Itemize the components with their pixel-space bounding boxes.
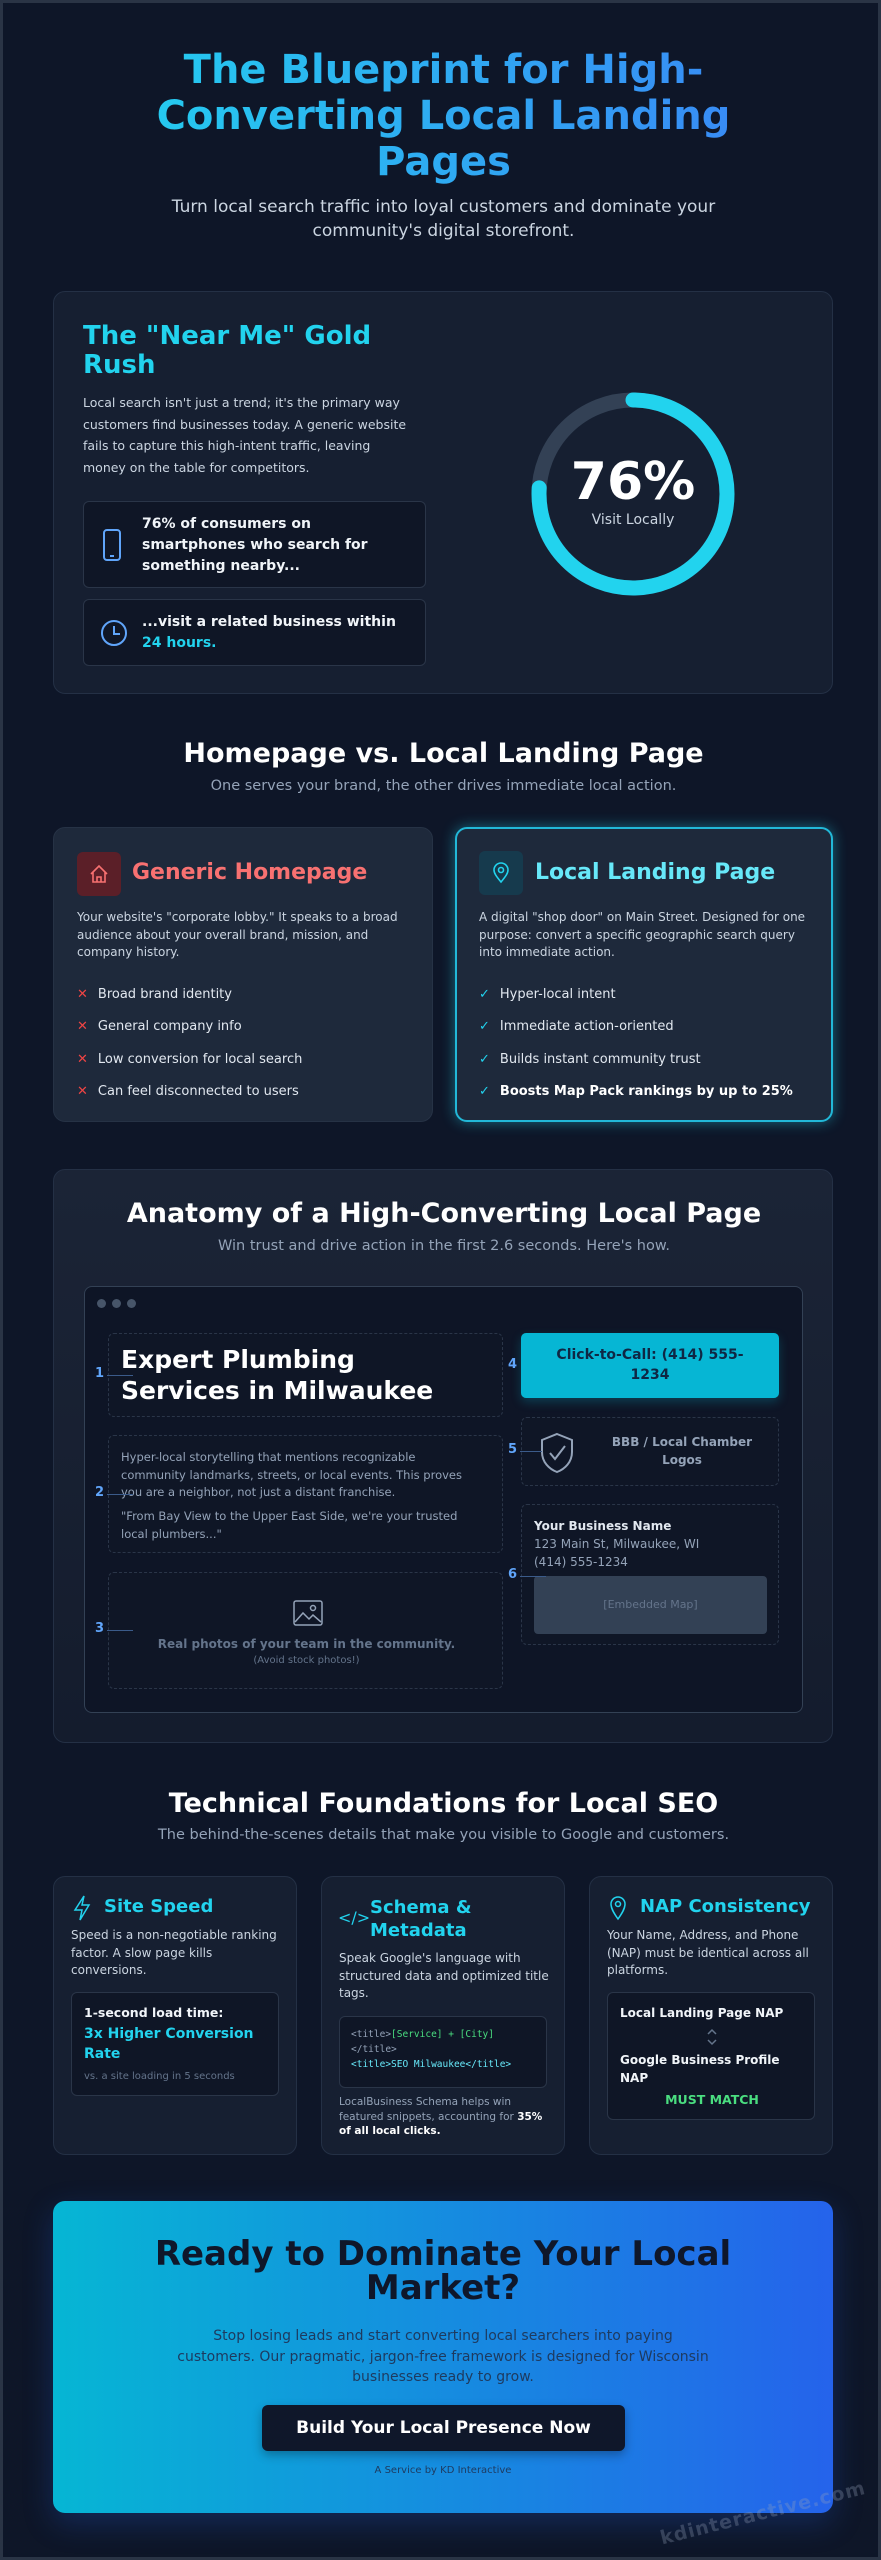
panel: generic homepage [53, 827, 433, 1122]
list: cons: ✕ General company info [77, 1019, 242, 1034]
title: The Blueprint for High- [184, 47, 703, 93]
CTA text: customers. Our pragmatic, jargon-free framework is designed for Wisconsin [177, 2348, 709, 2364]
card: site speed: Speed is a non-negotiable ranking factor. A slow page kills conversions. [71, 1928, 277, 1977]
list: pros: ✓ Immediate action-oriented [479, 1019, 674, 1034]
list: cons [77, 987, 302, 1099]
block 4: click to call: 1234 [631, 1367, 669, 1383]
icon: image [293, 1600, 323, 1626]
list: pros [479, 987, 793, 1099]
list: pros: ✓ Boosts Map Pack rankings by up to 25% [479, 1084, 793, 1099]
marker 1: 1 [95, 1366, 104, 1381]
donut label: Visit Locally [592, 512, 674, 528]
list: pros: ✓ Hyper-local intent [479, 987, 616, 1002]
CTA text: businesses ready to grow. [352, 2369, 534, 2385]
block 2: storytelling: "From Bay View to the Upper East Side, we're your trusted local plumbers..." [121, 1509, 457, 1540]
icon: clock [101, 620, 127, 646]
block 3: photos: (Avoid stock photos!) [253, 1655, 360, 1666]
subheading: Win trust and drive action in the first 2.6 seconds. Here's how. [218, 1238, 670, 1254]
CTA panel [53, 2201, 833, 2513]
embedded map: [Embedded Map] [603, 1598, 698, 1611]
card: schema: LocalBusiness Schema helps win featured snippets, accounting for 35% of all local clicks. [339, 2096, 542, 2137]
card: NAP [589, 1876, 833, 2155]
icon: map pin [479, 851, 523, 895]
block 3: photos [108, 1572, 503, 1689]
CTA button: Build Your Local Presence Now [296, 2418, 591, 2438]
marker 3: 3 [95, 1621, 104, 1636]
block 3: photos: Real photos of your team in the community. [158, 1637, 455, 1651]
heading: The "Near Me" Gold Rush [83, 321, 371, 380]
title [63, 47, 824, 185]
block 2: storytelling: Hyper-local storytelling that mentions recognizable community landmarks, streets, or local events. This proves you are a neighbor, not just a distant franchise. [121, 1450, 462, 1499]
body text: fails to capture this high-intent traffic, leaving [83, 438, 370, 453]
browser mockup [84, 1286, 803, 1713]
block 6: NAP + map [521, 1504, 779, 1645]
card: NAP: Your Name, Address, and Phone (NAP) must be identical across all platforms. [607, 1928, 809, 1977]
icon: house [77, 852, 121, 896]
embedded map [534, 1576, 767, 1634]
block 5: trust logos [521, 1417, 779, 1486]
match box [607, 1992, 815, 2120]
subheading: One serves your brand, the other drives immediate local action. [211, 778, 676, 794]
panel: near me gold rush [53, 291, 833, 694]
body text [83, 395, 406, 474]
body text: customers find businesses today. A generic website [83, 416, 406, 432]
code box: </title> [351, 2044, 397, 2055]
CTA button [262, 2405, 625, 2451]
heading: Anatomy of a High-Converting Local Page [127, 1198, 761, 1229]
list: cons: ✕ Low conversion for local search [77, 1052, 302, 1067]
title: Generic Homepage [132, 860, 367, 885]
body text: Local search isn't just a trend; it's the primary way [83, 395, 400, 410]
body text: money on the table for competitors. [83, 460, 310, 474]
stat box: smartphones [83, 501, 426, 588]
stat box: 1-second load time: [84, 2005, 223, 2020]
block 1: headline: Services in Milwaukee [121, 1376, 433, 1405]
donut value: 76% [571, 452, 695, 512]
heading: homepage vs local: Homepage vs. Local Landing Page [183, 738, 704, 769]
card: site speed [53, 1876, 297, 2155]
card: schema [321, 1876, 565, 2155]
stat box [71, 1992, 279, 2096]
stat box: 24 hours [83, 599, 426, 666]
title: Pages [376, 139, 511, 185]
footer credit: A Service by KD Interactive [375, 2465, 511, 2476]
title: Converting Local Landing [157, 93, 730, 139]
block 1: headline [108, 1333, 503, 1417]
match box: Local Landing Page NAP [620, 2006, 783, 2020]
panel: local landing page [455, 827, 833, 1122]
CTA heading: Ready to Dominate Your Local Market? [155, 2234, 731, 2308]
stat text: 24 hours. [142, 635, 216, 651]
icon: code: </> [338, 1908, 370, 1927]
card: schema: Schema & [370, 1897, 472, 1918]
icon: phone [103, 529, 121, 561]
list: pros: ✓ Builds instant community trust [479, 1052, 701, 1067]
stat text: ...visit a related business within [142, 614, 396, 630]
block 5: trust logos: BBB / Local Chamber [612, 1435, 752, 1449]
subheading: The behind-the-scenes details that make you visible to Google and customers. [158, 1827, 729, 1843]
icon: bolt [74, 1896, 90, 1920]
donut chart 76% [532, 392, 734, 596]
block 4: click to call: Click-to-Call: (414) 555- [556, 1347, 744, 1363]
stat box: vs. a site loading in 5 seconds [84, 2071, 235, 2082]
block 6: NAP + map: Your Business Name [534, 1519, 671, 1533]
card: schema: Speak Google's language with structured data and optimized title tags. [339, 1951, 549, 2000]
code box [339, 2016, 547, 2088]
stat text: 76% of consumers on smartphones who search for something nearby... [142, 516, 368, 574]
list: cons: ✕ Broad brand identity [77, 987, 232, 1002]
icon: shield [541, 1432, 573, 1473]
watermark: kdinteractive.com [658, 2477, 868, 2549]
stat box: 3x Higher Conversion Rate [84, 2026, 254, 2062]
block 4: click to call [521, 1333, 779, 1398]
CTA text: Stop losing leads and start converting local searchers into paying [213, 2328, 673, 2344]
marker 5: 5 [508, 1442, 517, 1457]
match box: MUST MATCH [665, 2092, 759, 2107]
marker 2: 2 [95, 1485, 104, 1500]
panel: anatomy [53, 1169, 833, 1743]
code box: <title>SEO Milwaukee</title> [351, 2059, 511, 2070]
stat text [142, 614, 396, 651]
subtitle: Turn local search traffic into loyal customers and dominate your community's digital storefront. [172, 197, 715, 241]
block 6: NAP + map: 123 Main St, Milwaukee, WI [534, 1537, 699, 1551]
marker 6: 6 [508, 1567, 517, 1582]
card: site speed: Site Speed [104, 1896, 213, 1917]
marker 4: 4 [508, 1357, 517, 1372]
title: Local Landing Page [535, 860, 775, 885]
icon: pin [610, 1896, 626, 1920]
CTA text [177, 2328, 709, 2385]
browser dots [97, 1299, 136, 1308]
icon: up-down arrows [708, 2029, 716, 2045]
card: schema: Metadata [370, 1920, 467, 1941]
description: A digital "shop door" on Main Street. Designed for one purpose: convert a specific geographic search query into immediate action. [479, 910, 805, 959]
block 6: NAP + map: (414) 555-1234 [534, 1555, 628, 1569]
code box: <title>[Service] + [City] [351, 2029, 494, 2040]
match box: Google Business Profile NAP [620, 2053, 780, 2085]
block 2: storytelling [108, 1435, 503, 1553]
list: cons: ✕ Can feel disconnected to users [77, 1084, 299, 1099]
description: Your website's "corporate lobby." It speaks to a broad audience about your overall brand, mission, and company history. [77, 910, 398, 959]
heading: technical foundations: Technical Foundations for Local SEO [169, 1788, 718, 1819]
block 1: headline: Expert Plumbing [121, 1345, 355, 1374]
block 5: trust logos: Logos [662, 1453, 702, 1467]
card: NAP: NAP Consistency [640, 1896, 810, 1917]
